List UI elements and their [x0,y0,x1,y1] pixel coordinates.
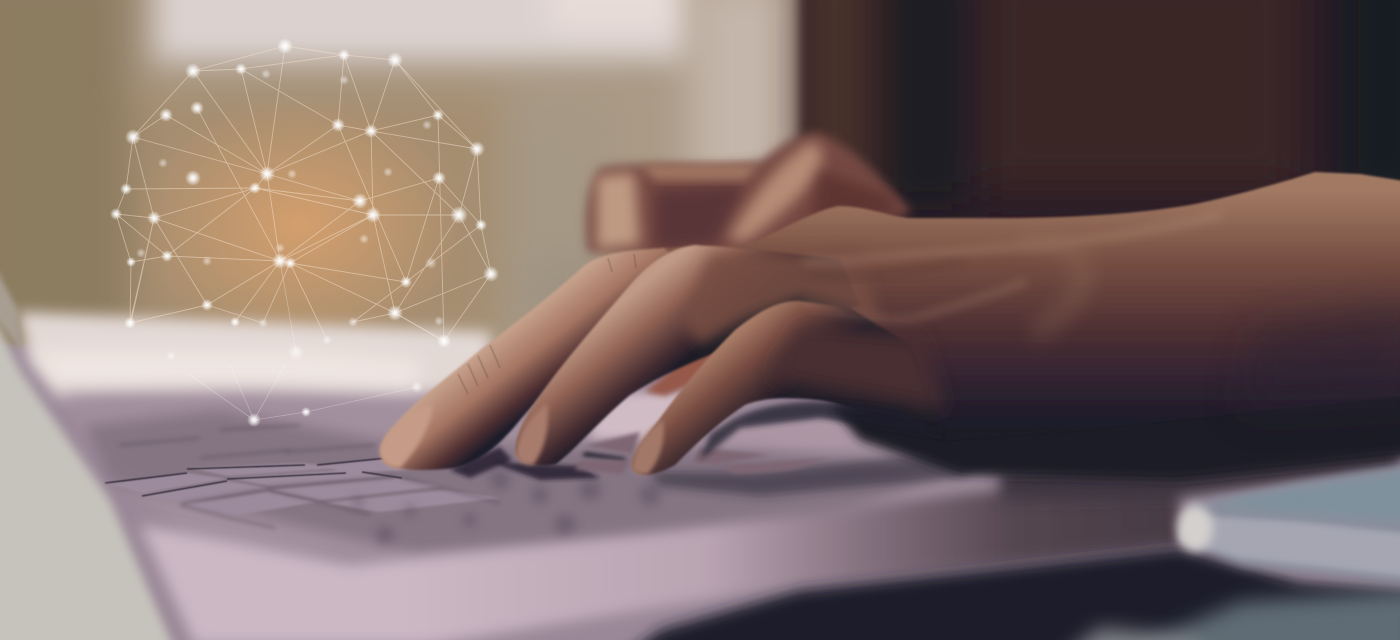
network globe [110,38,499,427]
laptop front edge [140,470,1185,640]
middle finger [516,245,860,466]
index fingernail [380,404,432,468]
dark gap below laptop [620,445,1400,640]
highlight ridges on back of hand [805,215,1220,330]
keyboard keys [85,410,1000,555]
dark keys by the fingertips [450,447,626,480]
phone on the desk [1177,462,1400,585]
front hand [380,172,1400,480]
index finger [381,248,690,470]
faint lower lines [190,261,444,420]
network lines [116,46,491,341]
middle fingernail [516,403,548,465]
ring finger [632,301,945,474]
left laptop screen [0,240,175,640]
blend of knuckles into hand [680,250,880,345]
shadow under hand [830,385,1400,480]
blurred window background [0,0,840,360]
knuckle creases [458,254,636,394]
ring fingernail [632,420,664,475]
gap finger behind [645,350,720,396]
desk surface [0,312,1400,640]
arm and back of hand [660,172,1400,440]
glowing nodes [110,38,499,427]
blurred key corners [352,470,661,544]
dark clothing background [800,0,1400,280]
hand shadow above ring finger wrist [770,325,945,410]
laptop keyboard deck [55,390,1000,560]
back hand [586,133,912,262]
